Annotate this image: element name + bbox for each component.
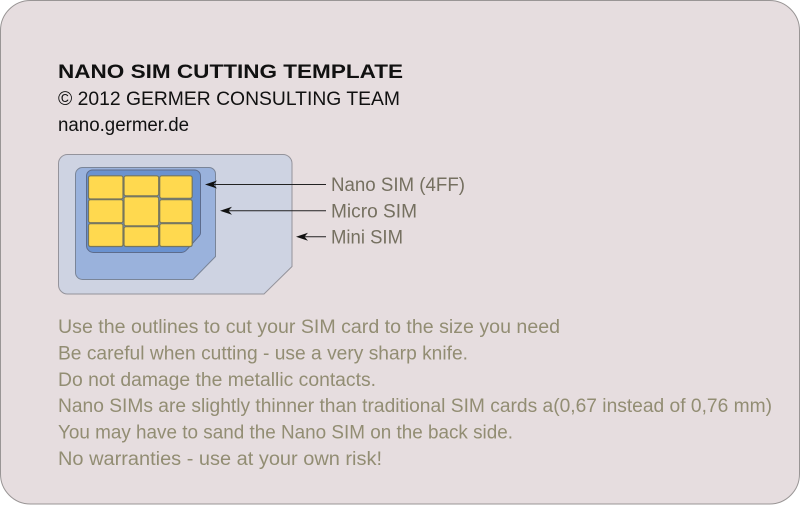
instructions text block: Nano SIMs are slightly thinner than traditional SIM cards a(0,67 instead of 0,76 mm) — [58, 396, 772, 417]
instructions text block: Do not damage the metallic contacts. — [58, 370, 376, 391]
instructions text block: No warranties - use at your own risk! — [58, 449, 382, 470]
label: nano SIM: Nano SIM (4FF) — [331, 175, 465, 196]
micro SIM outline — [76, 168, 216, 280]
nano SIM outline — [86, 170, 200, 252]
instructions text block: You may have to sand the Nano SIM on the back side. — [58, 422, 513, 444]
arrow: nano SIM — [205, 180, 326, 188]
metallic contacts — [88, 176, 192, 246]
arrow: micro SIM — [220, 207, 326, 215]
label: micro SIM: Micro SIM — [331, 202, 417, 222]
heading: NANO SIM CUTTING TEMPLATE — [58, 62, 403, 83]
label: mini SIM: Mini SIM — [331, 228, 403, 248]
copyright line: © 2012 GERMER CONSULTING TEAM — [58, 89, 400, 110]
instructions text block: Use the outlines to cut your SIM card to the size you need — [58, 317, 560, 338]
instructions text block: Be careful when cutting - use a very sharp knife. — [58, 344, 468, 364]
mini SIM outline — [58, 154, 292, 294]
title block — [58, 62, 403, 136]
SIM diagram — [58, 154, 292, 294]
arrow: mini SIM — [296, 233, 326, 241]
instructions text block — [58, 317, 772, 470]
website: nano.germer.de — [58, 115, 189, 136]
